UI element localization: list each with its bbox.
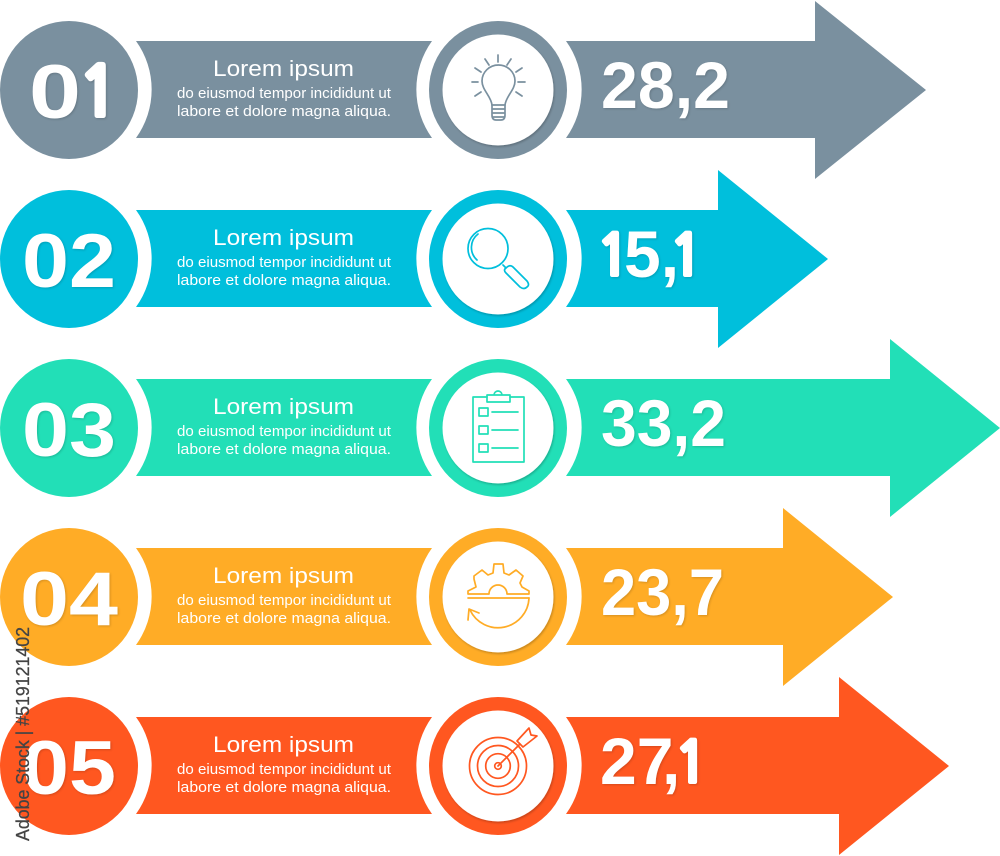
value arrow 02: 1 [669,228,704,284]
label bar 03: Lorem ipsum [213,394,354,419]
label bar 01 [136,41,432,138]
number badge 04: 04 [20,557,118,642]
icon ring 02 [429,190,567,328]
number badge 03: 03 [22,388,116,473]
label bar 05: do eiusmod tempor incididunt ut [177,762,391,778]
value arrow 04 [566,508,893,686]
label bar 02 [136,210,432,307]
value arrow 02 [566,170,828,348]
row 03: teal [0,339,1000,517]
number badge 05 [0,697,138,835]
icon ring 05 [429,697,567,835]
icon: magnifying glass [468,228,528,288]
label bar 01: labore et dolore magna aliqua. [177,104,391,120]
number badge 02 [0,190,138,328]
value arrow 02: 5, [624,217,679,291]
stock id side label: Adobe Stock | #519121402 [13,627,33,841]
value arrow 05: 1 [674,736,709,792]
icon: light bulb [472,55,525,120]
label bar 01: do eiusmod tempor incididunt ut [177,86,391,102]
label bar 03: do eiusmod tempor incididunt ut [177,424,391,440]
label bar 05: Lorem ipsum [213,732,354,757]
icon ring 03 [429,359,567,497]
number badge 02: 02 [22,219,116,304]
number badge 01: 0 [29,50,81,135]
label bar 02: Lorem ipsum [213,225,354,250]
label bar 05: labore et dolore magna aliqua. [177,780,391,796]
value arrow 03 [566,339,1000,517]
row 05: red [0,677,949,855]
value arrow 01 [566,1,926,179]
value arrow 03: 33,2 [601,386,726,460]
icon ring 01 [429,21,567,159]
label bar 04: Lorem ipsum [213,563,354,588]
number badge 04 [0,528,138,666]
icon: clipboard checklist [473,391,524,462]
value arrow 05: , [662,724,680,798]
icon: target with arrow [470,728,537,794]
number badge 01: 1 [78,60,119,127]
value arrow 02: 1 [596,228,631,284]
label bar 04: do eiusmod tempor incididunt ut [177,593,391,609]
label bar 04: labore et dolore magna aliqua. [177,611,391,627]
label bar 03: labore et dolore magna aliqua. [177,442,391,458]
label bar 01: Lorem ipsum [213,56,354,81]
value arrow 05 [566,677,949,855]
icon ring 04 [429,528,567,666]
label bar 02: labore et dolore magna aliqua. [177,273,391,289]
value arrow 04: 23,7 [601,555,724,629]
value arrow 05: 27 [600,724,673,798]
label bar 04 [136,548,432,645]
number badge 05: 05 [22,726,116,811]
label bar 05 [136,717,432,814]
row 02: blue [0,170,828,348]
row 01: grey [0,1,926,179]
number badge 03 [0,359,138,497]
value arrow 01: 28,2 [601,48,730,122]
row 04: orange [0,508,893,686]
label bar 02: do eiusmod tempor incididunt ut [177,255,391,271]
icon: gear with cycle arrow [468,564,529,628]
number badge 01 [0,21,138,159]
label bar 03 [136,379,432,476]
